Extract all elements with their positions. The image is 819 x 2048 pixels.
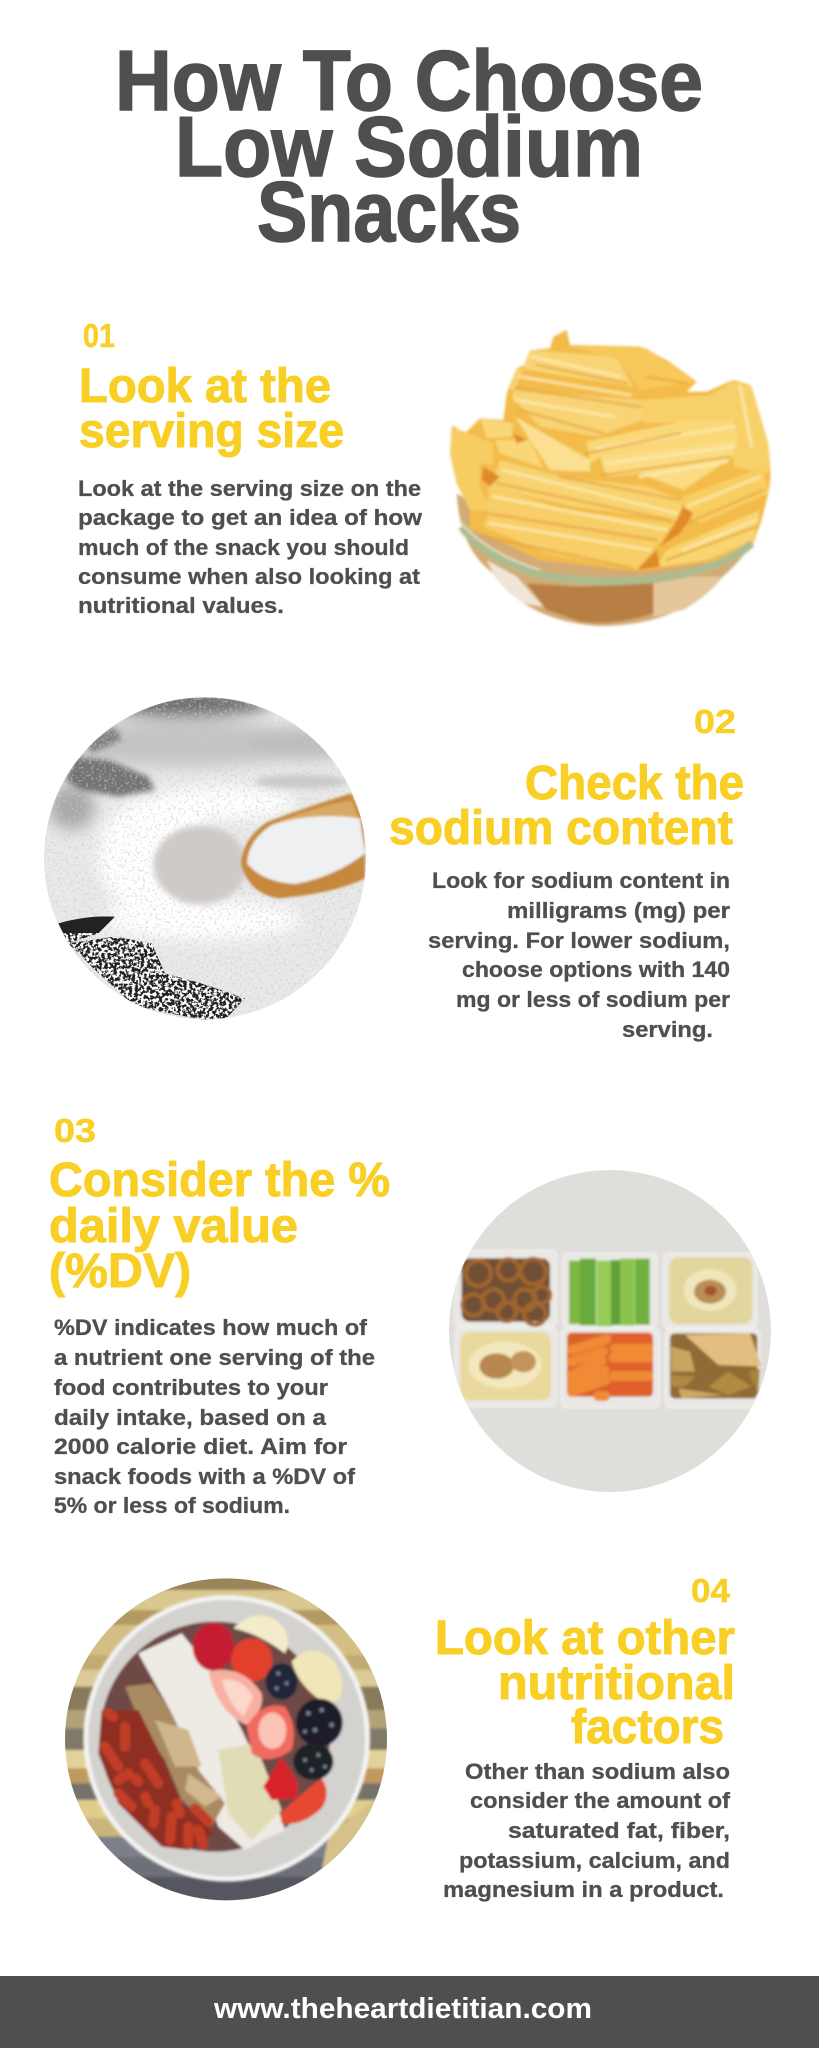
strawberries <box>193 1623 234 1671</box>
heading: consider the percent daily value <box>49 1154 390 1298</box>
body text: step 4: potassium, calcium, and <box>459 1848 730 1873</box>
body text: step 3: a nutrient one serving of the <box>54 1345 375 1370</box>
body text: step 3 <box>54 1315 375 1518</box>
body text: step 3: food contributes to your <box>54 1375 328 1400</box>
body text: step 4: Other than sodium also <box>465 1759 730 1784</box>
title: How To Choose <box>115 34 703 129</box>
body text: step 3: 2000 calorie diet. Aim for <box>54 1434 347 1459</box>
carrots <box>567 1333 653 1397</box>
heading: check the sodium content: sodium content <box>389 802 733 855</box>
containers <box>455 1250 760 1408</box>
body text: step 1: nutritional values. <box>78 593 284 618</box>
body text: step 1: package to get an idea of how <box>78 505 423 530</box>
body text: step 2 <box>428 868 730 1042</box>
heading: look at other nutritional factors: nutritional <box>498 1657 735 1710</box>
body text: step 2: choose options with 140 <box>462 957 730 982</box>
panel: step 4 other nutritional factors <box>55 1570 735 1910</box>
heading: check the sodium content <box>389 757 744 855</box>
nuts <box>125 1683 225 1827</box>
hummus top right <box>669 1257 752 1324</box>
step number 02: 02 <box>694 703 736 740</box>
heading: look at other nutritional factors <box>435 1612 735 1754</box>
title: Low Sodium <box>175 100 643 195</box>
panel: step 3 percent daily value <box>49 1112 771 1518</box>
panel: step 1 serving size <box>78 317 771 626</box>
body text: step 4: saturated fat, fiber, <box>508 1818 730 1843</box>
celery <box>569 1261 581 1324</box>
title <box>115 34 703 260</box>
step number 01: 01 <box>83 317 115 354</box>
bowl <box>83 1595 370 1882</box>
coconut stripe <box>138 1633 285 1850</box>
body text: step 2: serving. For lower sodium, <box>428 928 730 953</box>
image: smoothie bowl with berries, banana, coconut and goji <box>65 1578 387 1900</box>
body text: step 2: Look for sodium content in <box>432 868 730 893</box>
body text: step 1: much of the snack you should <box>78 535 409 560</box>
step number 03: 03 <box>54 1112 96 1149</box>
heading: consider the percent daily value: Consider the % <box>49 1154 390 1207</box>
panel: step 2 sodium content <box>35 690 744 1042</box>
pretzels <box>462 1258 550 1322</box>
heading: look at the serving size: Look at the <box>79 360 331 413</box>
body text: step 1: Look at the serving size on the <box>78 476 421 501</box>
wooden spoon <box>241 793 365 898</box>
footer bar with website <box>0 1976 819 2048</box>
pita chips <box>670 1333 757 1398</box>
blackberries <box>266 1663 298 1700</box>
body text: step 4: consider the amount of <box>470 1788 731 1813</box>
body text: step 4 <box>443 1759 731 1902</box>
body text: step 3: %DV indicates how much of <box>54 1315 368 1340</box>
wood table <box>55 1570 395 1910</box>
body text: step 1 <box>78 476 423 618</box>
hummus bottom left <box>460 1332 551 1400</box>
body text: step 1: consume when also looking at <box>78 564 421 589</box>
body text: step 4: magnesium in a product. <box>443 1877 724 1902</box>
body text: step 3: daily intake, based on a <box>54 1405 327 1430</box>
heading: look at the serving size <box>79 360 344 458</box>
body text: step 2: mg or less of sodium per <box>456 987 730 1012</box>
heading: consider the percent daily value: daily value <box>49 1200 298 1253</box>
body text: step 3: 5% or less of sodium. <box>54 1493 290 1518</box>
image: snack containers with pretzels, celery, hummus, carrots and pita chips <box>449 1170 771 1492</box>
heading: look at the serving size: serving size <box>79 405 344 458</box>
heading: look at other nutritional factors: factors <box>571 1701 724 1754</box>
dark table showing through salt <box>58 916 245 1020</box>
bananas <box>233 1616 288 1653</box>
image: bowl of ridged chips <box>450 330 771 626</box>
body text: step 2: milligrams (mg) per <box>507 898 730 923</box>
image: scattered salt with wooden spoon <box>35 690 375 1030</box>
heading: look at other nutritional factors: Look at other <box>435 1612 735 1665</box>
footer bar with website: www.theheartdietitian.com <box>213 1993 592 2025</box>
title: Snacks <box>257 165 521 260</box>
body text: step 3: snack foods with a %DV of <box>54 1464 356 1489</box>
goji <box>98 1710 215 1850</box>
heading: consider the percent daily value: (%DV) <box>49 1245 191 1298</box>
step number 04: 04 <box>691 1572 731 1609</box>
body text: step 2: serving. <box>622 1017 713 1042</box>
heading: check the sodium content: Check the <box>525 757 744 810</box>
